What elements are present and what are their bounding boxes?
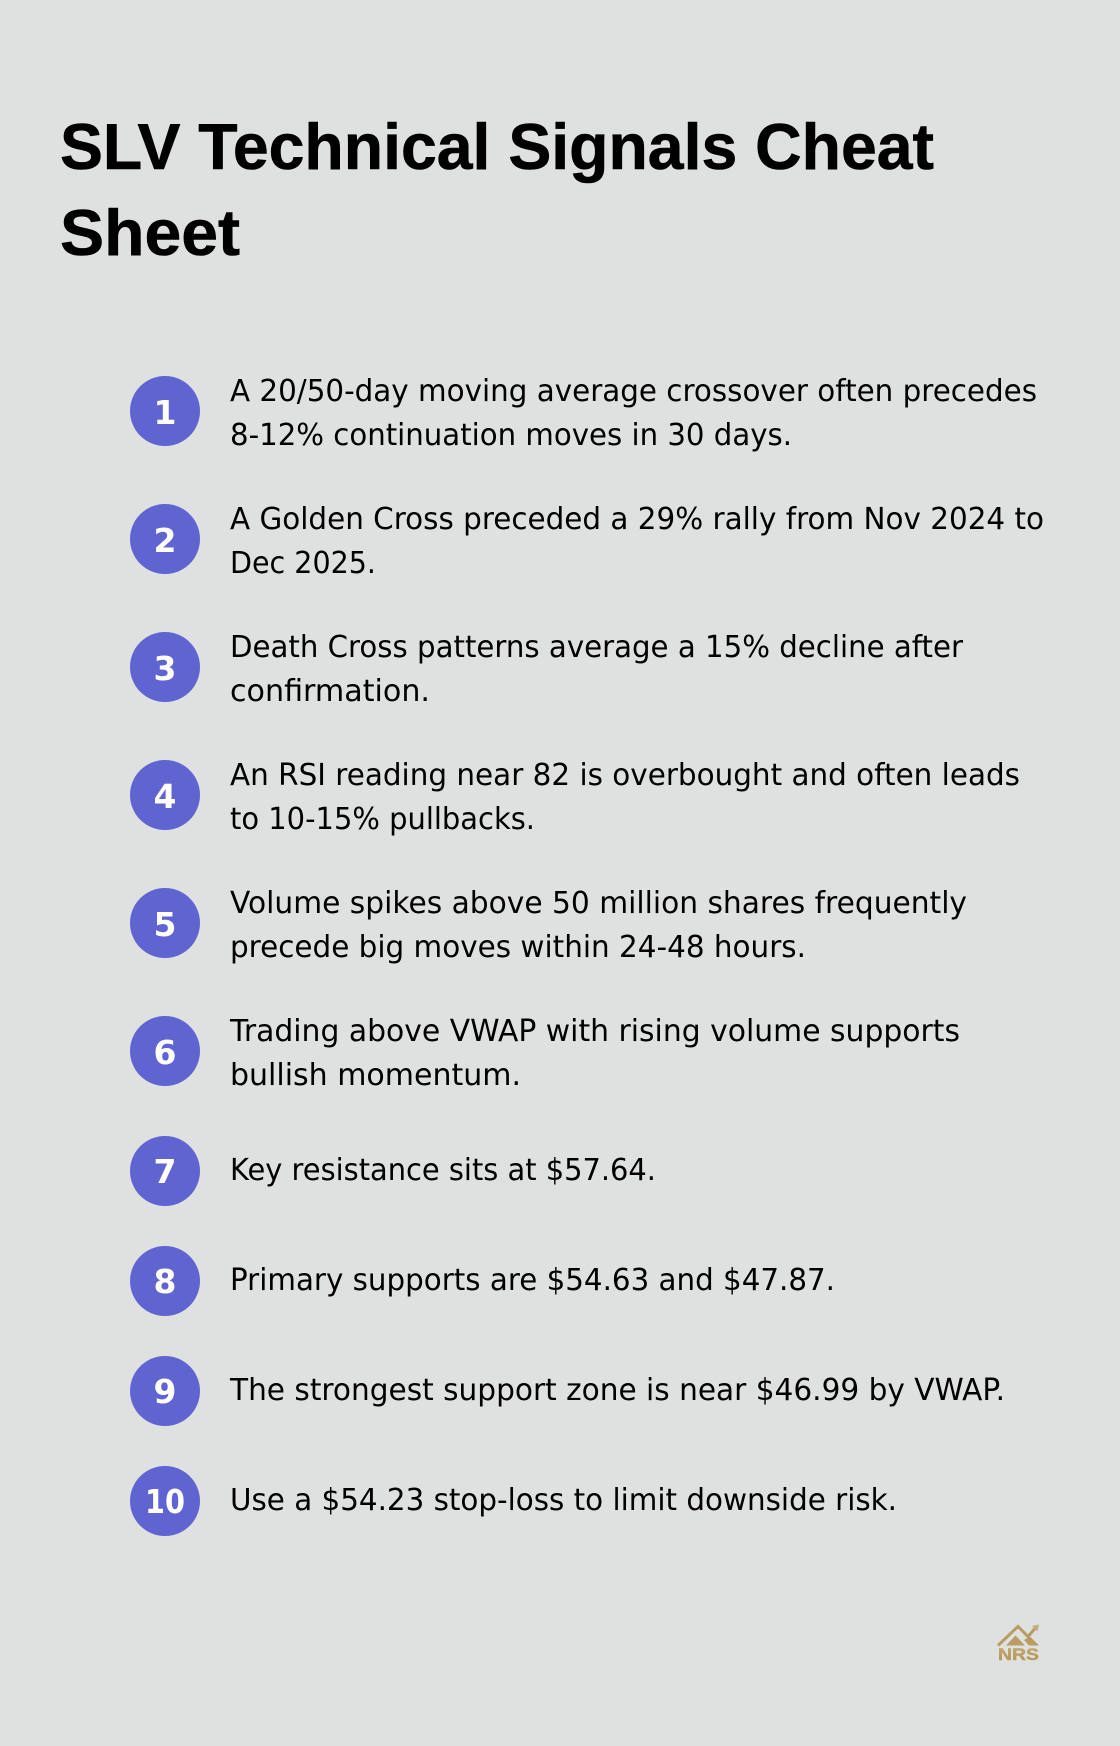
title [60,111,934,269]
list of signals [130,374,1044,1536]
item 6 [130,1014,960,1093]
title: SLV Technical Signals Cheat [60,111,934,183]
item 4: to 10-15% pullbacks. [230,802,535,837]
item 6: 6 [154,1033,176,1072]
item 6: bullish momentum. [230,1058,521,1093]
icon: NRS logo [998,1624,1039,1664]
item 10 [130,1466,897,1536]
item 3: Death Cross patterns average a 15% decline after [230,630,964,665]
item 5: precede big moves within 24-48 hours. [230,930,806,965]
item 1: 1 [154,393,176,432]
item 9: 9 [154,1372,176,1411]
item 8: Primary supports are $54.63 and $47.87. [230,1263,835,1298]
item 10: 10 [145,1482,185,1521]
title: Sheet [60,197,240,269]
item 2: 2 [154,521,176,560]
item 4: An RSI reading near 82 is overbought and often leads [230,758,1020,793]
item 7 [130,1136,656,1206]
item 3 [130,630,964,709]
item 3: confirmation. [230,674,430,709]
item 1: A 20/50-day moving average crossover often precedes [230,374,1037,409]
item 1 [130,374,1037,453]
item 2 [130,502,1044,581]
item 3: 3 [154,649,176,688]
item 5 [130,886,967,965]
item 6: Trading above VWAP with rising volume supports [229,1014,960,1049]
icon: NRS logo: NRS [998,1645,1039,1664]
item 4: 4 [154,777,176,816]
item 2: Dec 2025. [230,546,376,581]
item 5: Volume spikes above 50 million shares frequently [230,886,967,921]
item 1: 8-12% continuation moves in 30 days. [230,418,792,453]
item 9 [130,1356,1005,1426]
item 4 [130,758,1020,837]
item 2: A Golden Cross preceded a 29% rally from Nov 2024 to [230,502,1044,537]
item 9: The strongest support zone is near $46.99 by VWAP. [229,1373,1005,1408]
item 8 [130,1246,835,1316]
item 7: Key resistance sits at $57.64. [230,1153,656,1188]
item 5: 5 [154,905,176,944]
item 8: 8 [154,1262,176,1301]
item 10: Use a $54.23 stop-loss to limit downside risk. [230,1483,897,1518]
item 7: 7 [154,1152,176,1191]
